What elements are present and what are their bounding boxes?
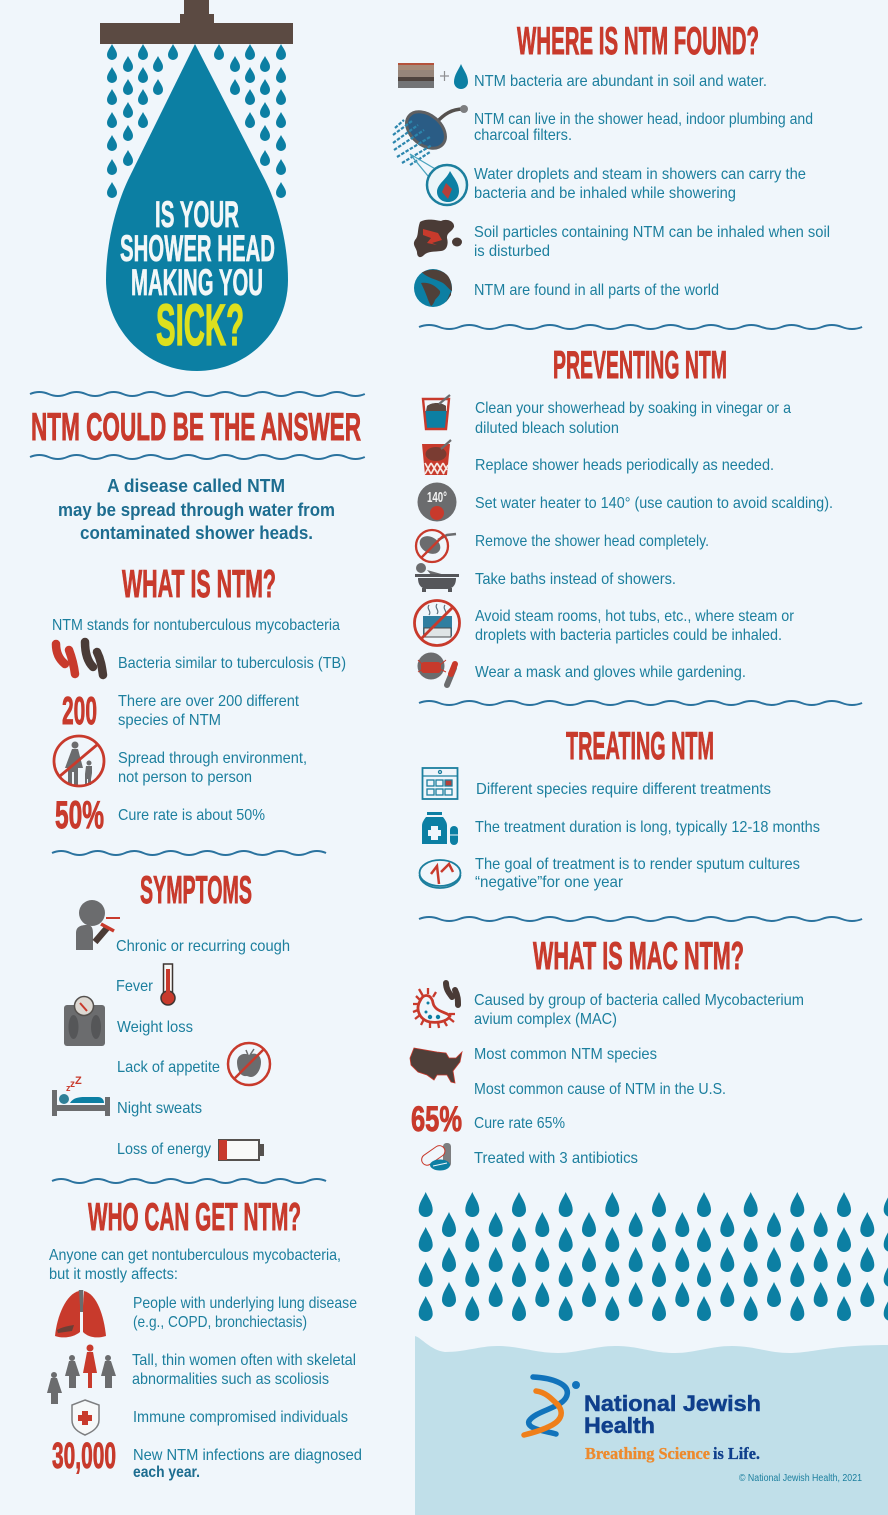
icon: 50 percent: 50% — [55, 794, 104, 837]
icon: 65 percent: 65% — [411, 1100, 462, 1139]
text: fever: Fever — [116, 978, 154, 995]
heading: WHO CAN GET NTM? — [88, 1196, 301, 1239]
panel: symptoms — [52, 869, 290, 1160]
text: species: There are over 200 different — [118, 693, 300, 710]
title — [120, 194, 275, 358]
icon: medicine bottle — [422, 812, 458, 845]
icon: USA map — [410, 1048, 462, 1083]
text: goal: “negative”for one year — [475, 874, 624, 891]
text: soil and water: NTM bacteria are abundant in soil and water. — [474, 73, 767, 90]
panel: preventing NTM — [414, 344, 833, 685]
text: soil particles: is disturbed — [474, 243, 550, 260]
text: droplets — [474, 166, 806, 202]
logo: wordmark — [584, 1391, 761, 1438]
intro text: may be spread through water from — [58, 500, 335, 520]
text: spread — [118, 750, 307, 786]
text: lung disease: People with underlying lung disease — [133, 1295, 357, 1312]
icon: no steam room — [414, 600, 460, 646]
text: remove: Remove the shower head completely. — [475, 533, 709, 550]
text: clean — [475, 400, 791, 437]
logo: tagline: is Life. — [713, 1444, 760, 1463]
icon: pills — [419, 1143, 451, 1170]
icon: bed: z — [66, 1083, 71, 1093]
text: clean: Clean your showerhead by soaking in vinegar or a — [475, 400, 791, 417]
text: most common cause: Most common cause of NTM in the U.S. — [474, 1081, 726, 1098]
panel: where is NTM found — [393, 20, 830, 307]
text: species — [118, 693, 300, 729]
text: night sweats: Night sweats — [117, 1100, 202, 1117]
icon: bacteria — [56, 642, 103, 675]
text: soil particles — [474, 224, 830, 260]
text: droplets: Water droplets and steam in showers can carry the — [474, 166, 806, 183]
text: droplets: bacteria and be inhaled while showering — [474, 185, 736, 202]
text: spread: not person to person — [118, 769, 252, 786]
text: new infections: each year. — [133, 1464, 200, 1481]
icon: globe — [414, 269, 452, 307]
icon: no shower head — [416, 530, 456, 562]
panel: treating NTM — [420, 725, 820, 891]
intro text: A disease called NTM — [107, 476, 285, 496]
icon: no person to person — [54, 736, 104, 786]
icon: soil particles — [414, 220, 462, 257]
text: goal: The goal of treatment is to render sputum cultures — [475, 856, 800, 873]
icon: lungs — [55, 1290, 106, 1337]
text: lung disease: (e.g., COPD, bronchiectasis) — [133, 1314, 307, 1331]
icon: bathtub — [415, 563, 459, 592]
text: appetite: Lack of appetite — [117, 1059, 220, 1076]
icon: falling water drops — [107, 44, 286, 198]
panel: who can get NTM — [47, 1196, 362, 1481]
title: IS YOUR — [155, 194, 239, 235]
big water drop — [106, 44, 288, 371]
text: species: species of NTM — [118, 712, 221, 729]
logo: wordmark: National Jewish — [584, 1391, 761, 1416]
rain drops pattern — [419, 1192, 888, 1321]
text: immune: Immune compromised individuals — [133, 1409, 348, 1426]
text: tall thin women — [132, 1352, 356, 1388]
heading: TREATING NTM — [566, 725, 714, 768]
panel: NTM could be the answer — [30, 392, 365, 543]
icon: mask and glove — [418, 652, 455, 685]
text: shower head: charcoal filters. — [474, 127, 572, 144]
text: shower head — [474, 111, 813, 144]
icon: bed: z — [70, 1079, 75, 1090]
text: weight loss: Weight loss — [117, 1019, 193, 1036]
heading: SYMPTOMS — [140, 869, 252, 912]
text: baths: Take baths instead of showers. — [475, 571, 676, 588]
text: bacteria: Bacteria similar to tuberculosis (TB) — [118, 655, 346, 672]
text: mask: Wear a mask and gloves while gardening. — [475, 664, 746, 681]
icon: bed: Z — [75, 1075, 82, 1087]
text: lung disease — [133, 1295, 357, 1331]
text: cure rate 65: Cure rate 65% — [474, 1115, 565, 1132]
panel: shower head hero — [100, 0, 293, 371]
text: water heater: Set water heater to 140° (use caution to avoid scalding). — [475, 495, 833, 512]
text: cough: Chronic or recurring cough — [116, 938, 290, 955]
text: loss of energy: Loss of energy — [117, 1141, 211, 1158]
text: all parts: NTM are found in all parts of the world — [474, 282, 719, 299]
definition: NTM stands for nontuberculous mycobacteria — [52, 617, 340, 634]
text: avoid steam: Avoid steam rooms, hot tubs, etc., where steam or — [475, 608, 795, 625]
icon: shield — [72, 1400, 99, 1435]
text: goal — [475, 856, 800, 891]
text: different species: Different species require different treatments — [476, 781, 771, 798]
icon: bucket — [423, 395, 450, 429]
text: caused by — [474, 992, 804, 1028]
heading: WHAT IS NTM? — [122, 563, 276, 606]
logo: tagline: Breathing Science — [585, 1444, 710, 1463]
text: treated: Treated with 3 antibiotics — [474, 1150, 638, 1167]
text: spread: Spread through environment, — [118, 750, 307, 767]
icon: petri dish — [420, 860, 460, 888]
icon: 200: 200 — [62, 690, 97, 733]
icon: thermometer — [161, 964, 175, 1005]
text: avoid steam — [475, 608, 795, 644]
intro: Anyone can get nontuberculous mycobacteria, — [49, 1247, 341, 1264]
text: new infections — [133, 1447, 362, 1481]
icon: coughing person — [76, 900, 120, 950]
icon: women — [47, 1344, 116, 1404]
title: MAKING YOU — [131, 262, 263, 303]
intro — [49, 1247, 341, 1283]
text: replace: Replace shower heads periodically as needed. — [475, 457, 774, 474]
intro text — [58, 476, 335, 543]
text: avoid steam: droplets with bacteria particles could be inhaled. — [475, 627, 782, 644]
icon: weight scale — [64, 996, 105, 1046]
icon: basket — [422, 440, 451, 475]
icon: 30,000: 30,000 — [52, 1435, 116, 1476]
icon: no apple — [228, 1043, 270, 1085]
text: tall thin women: Tall, thin women often with skeletal — [132, 1352, 356, 1369]
title: SICK? — [156, 293, 244, 358]
text: caused by: Caused by group of bacteria called Mycobacterium — [474, 992, 804, 1009]
intro: but it mostly affects: — [49, 1266, 178, 1283]
copyright: © National Jewish Health, 2021 — [739, 1473, 862, 1484]
text: clean: diluted bleach solution — [475, 420, 619, 437]
icon: calendar — [422, 768, 458, 799]
icon: shower head with spray — [393, 104, 468, 205]
panel: water footer — [415, 1336, 888, 1515]
text: new infections: New NTM infections are diagnosed — [133, 1447, 362, 1464]
icon: 140 degree — [418, 482, 456, 522]
logo: helix mark — [524, 1377, 580, 1435]
icon: soil plus water — [398, 63, 468, 89]
panel: what is NTM — [52, 563, 346, 837]
text: soil particles: Soil particles containing NTM can be inhaled when soil — [474, 224, 830, 241]
icon: bed — [52, 1075, 110, 1116]
heading: NTM COULD BE THE ANSWER — [31, 406, 361, 449]
text: cure rate: Cure rate is about 50% — [118, 807, 265, 824]
text: caused by: avium complex (MAC) — [474, 1011, 617, 1028]
text: most common species: Most common NTM species — [474, 1046, 657, 1063]
text: shower head: NTM can live in the shower head, indoor plumbing and — [474, 111, 813, 128]
intro text: contaminated shower heads. — [80, 523, 313, 543]
icon: 140 degree: 140° — [427, 489, 447, 506]
title: SHOWER HEAD — [120, 228, 275, 269]
text: tall thin women: abnormalities such as scoliosis — [132, 1371, 329, 1388]
text: duration: The treatment duration is long, typically 12-18 months — [475, 819, 820, 836]
icon: MAC germ — [413, 983, 458, 1028]
panel: what is MAC NTM — [410, 935, 804, 1170]
icon: shower head — [100, 0, 293, 44]
icon: battery — [219, 1140, 264, 1160]
logo: wordmark: Health — [584, 1413, 655, 1438]
